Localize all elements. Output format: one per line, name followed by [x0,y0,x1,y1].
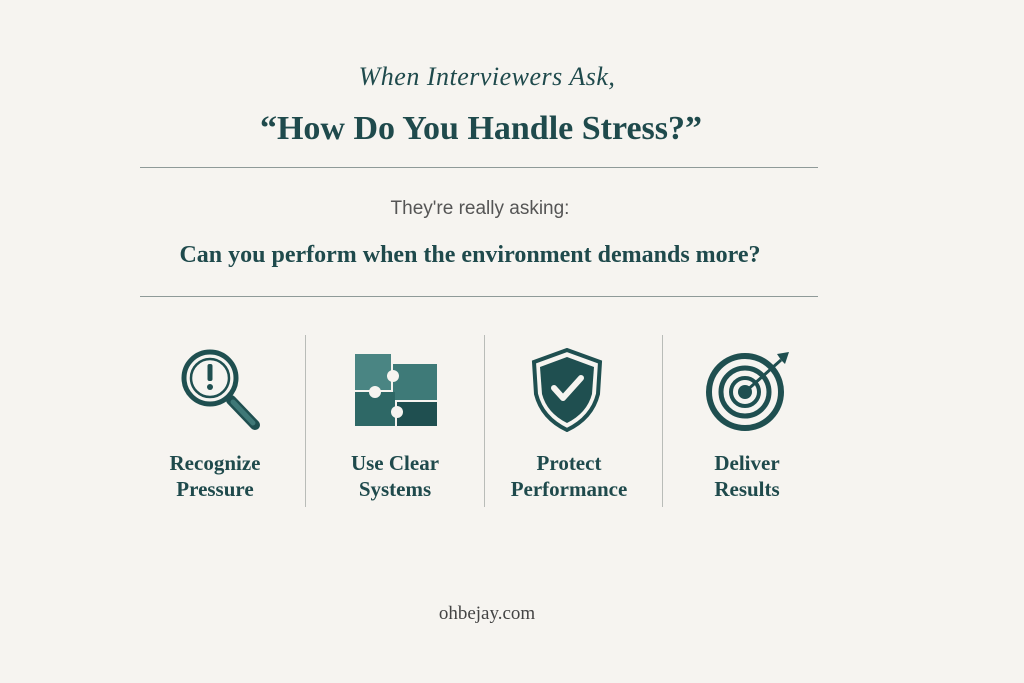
label: recognize pressure: Recognize [170,451,260,475]
text: really asking: They're really asking: [391,198,569,219]
label: protect performance: Performance [511,477,627,501]
label: protect performance [511,451,627,501]
label: deliver results: Deliver [714,451,780,475]
footer: ohbejay.com [439,603,535,624]
label: use clear systems [351,451,439,501]
title: “How Do You Handle Stress?” [260,110,702,147]
label: use clear systems: Systems [359,477,431,501]
label: protect performance: Protect [537,451,601,475]
icon: shield [532,348,602,432]
icon: magnifier [182,350,260,430]
label: recognize pressure [170,451,260,501]
subtitle: intro: When Interviewers Ask, [359,62,615,91]
label: deliver results: Results [714,477,780,501]
label: deliver results [714,451,780,501]
label: use clear systems: Use Clear [351,451,439,475]
question: Can you perform when the environment demands more? [179,242,761,268]
icon: puzzle [355,354,437,426]
label: recognize pressure: Pressure [176,477,254,501]
icon: target [706,352,789,431]
